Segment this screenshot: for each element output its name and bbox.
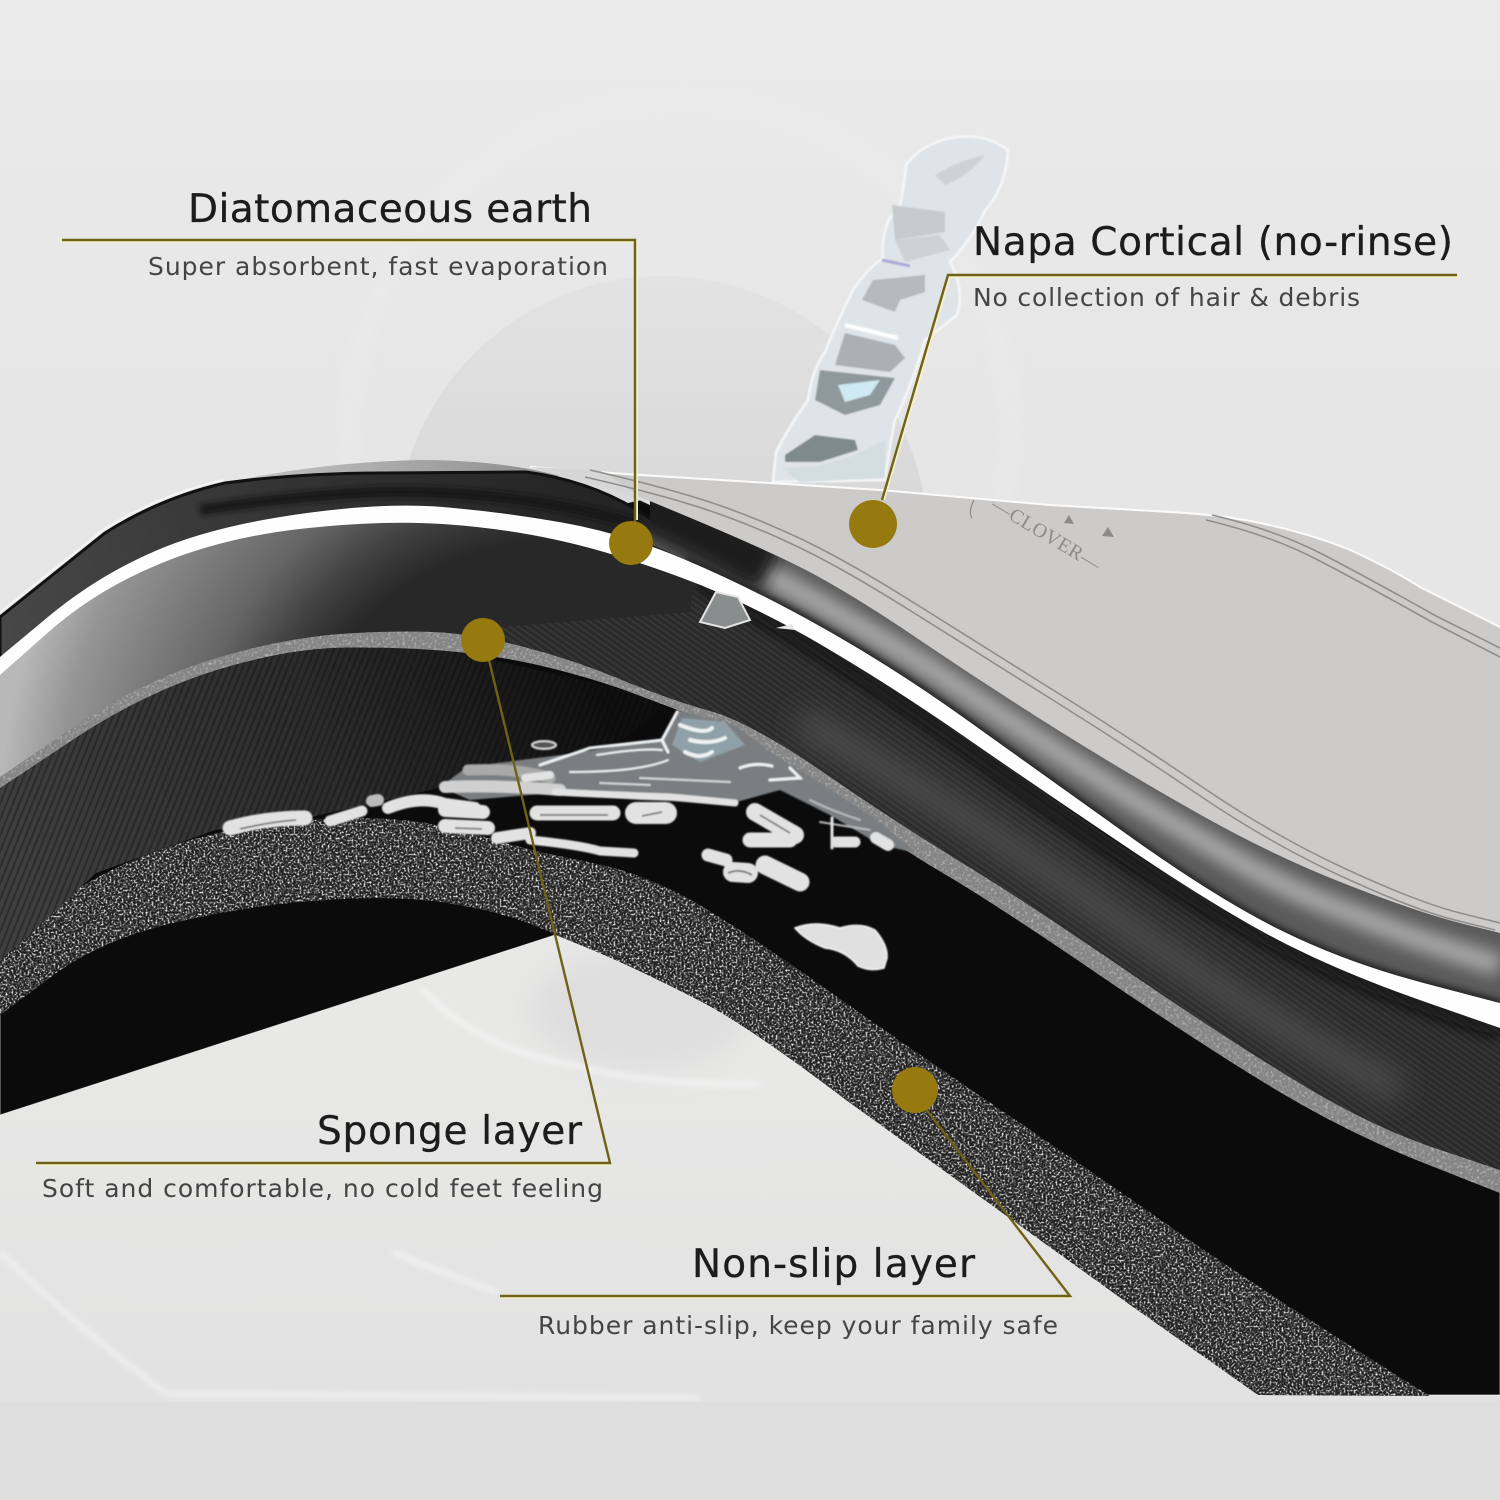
background disc [396,276,928,808]
white strip layer [0,506,1500,1028]
under-band fabric [0,647,670,960]
thin grey band layer [0,620,1500,1200]
callout: non-slip layer: Rubber anti-slip, keep your family safe [538,1311,1058,1340]
mat body and underside [0,500,1500,1395]
callout: napa cortical [849,220,1457,548]
callout: sponge layer: Sponge layer [317,1109,583,1154]
large droplet [795,924,887,970]
non-slip sponge layer [0,818,1430,1396]
outer top black layer [0,460,760,700]
callout: sponge layer: Soft and comfortable, no cold feet feeling [42,1174,603,1203]
shaded layer below grey sheet [650,501,1500,1003]
water column [773,136,1008,482]
callout: diatomaceous earth [62,187,653,565]
upper fabric layer [480,550,1500,1210]
stitching lines [585,470,1500,930]
grey napa top sheet [530,467,1500,933]
callout: diatomaceous earth: Diatomaceous earth [188,187,592,232]
water fragment under white strip [700,592,795,630]
water splash and droplets [230,710,917,970]
callout: napa cortical: No collection of hair & debris [973,283,1360,312]
smooth grey zone [0,506,1500,1193]
callout: napa cortical: Napa Cortical (no-rinse) [973,220,1453,265]
brand mark: —CLOVER— [987,493,1105,576]
callout: non-slip layer [500,1067,1072,1340]
callout: diatomaceous earth: Super absorbent, fast evaporation [148,252,608,281]
callout: sponge layer [36,618,611,1203]
callout: non-slip layer: Non-slip layer [692,1242,976,1287]
